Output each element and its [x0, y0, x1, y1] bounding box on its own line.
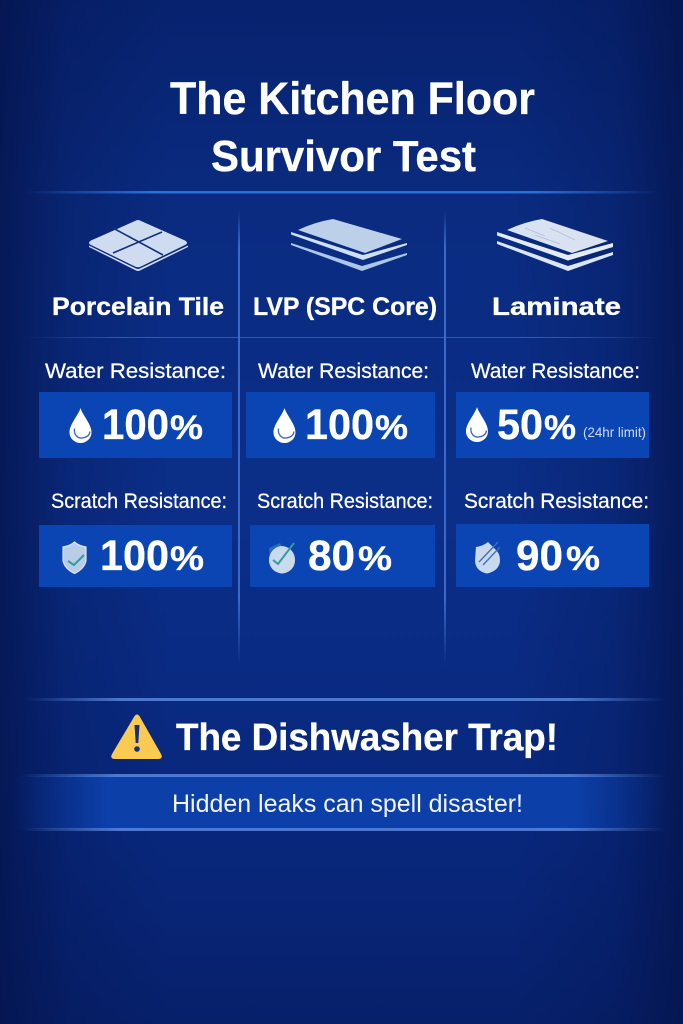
water stat: %: [375, 409, 408, 447]
scratch stat: [39, 525, 232, 587]
note: 24hr limit: (24hr limit): [583, 424, 646, 440]
scratch stat: 90: [516, 532, 563, 580]
scratch stat: 80: [308, 532, 355, 580]
scratch stat: [250, 525, 435, 587]
icon: scratched shield: [475, 542, 500, 574]
water stat: 100: [305, 401, 374, 449]
scratch stat: %: [170, 540, 204, 578]
scratch label: Scratch Resistance:: [257, 490, 433, 513]
title: The Kitchen Floor: [170, 73, 535, 124]
heading: dishwasher trap: The Dishwasher Trap!: [176, 717, 558, 759]
scratch stat: 100: [100, 532, 169, 580]
scratch stat: [456, 524, 649, 587]
banner: hidden leaks: Hidden leaks can spell disaster!: [172, 790, 523, 818]
icon: water drop: [70, 408, 92, 443]
water label: Water Resistance:: [471, 360, 640, 383]
callout: dishwasher trap: [111, 714, 558, 759]
scratch stat: %: [358, 540, 392, 578]
water stat: %: [170, 409, 203, 447]
icon: water drop: [466, 407, 488, 442]
water stat: 50: [497, 401, 543, 449]
panel: porcelain tile: [39, 220, 232, 587]
heading: LVP: LVP (SPC Core): [253, 293, 437, 321]
water stat: %: [544, 409, 576, 447]
icon: water drop: [274, 408, 296, 443]
icon: LVP planks: [291, 219, 407, 271]
banner: hidden leaks: [15, 774, 668, 831]
scratch label: Scratch Resistance:: [464, 490, 649, 513]
water stat: [246, 392, 435, 458]
icon: laminate planks: [497, 219, 613, 271]
panel: laminate: [456, 219, 649, 587]
title: Survivor Test: [211, 132, 476, 181]
water stat: [456, 392, 649, 458]
panel: LVP: [246, 219, 437, 587]
water stat: [39, 392, 232, 458]
scratch label: Scratch Resistance:: [51, 490, 227, 513]
icon: shield: [63, 542, 86, 574]
water stat: 100: [102, 401, 169, 449]
icon: scratched shield: [269, 543, 295, 574]
icon: porcelain tile: [89, 220, 188, 271]
water label: Water Resistance:: [45, 360, 226, 383]
icon: warning triangle: [111, 714, 162, 759]
heading: laminate: Laminate: [492, 293, 621, 321]
title: [170, 73, 535, 181]
heading: porcelain tile: Porcelain Tile: [52, 293, 224, 321]
water label: Water Resistance:: [258, 360, 429, 383]
scratch stat: %: [566, 540, 600, 578]
